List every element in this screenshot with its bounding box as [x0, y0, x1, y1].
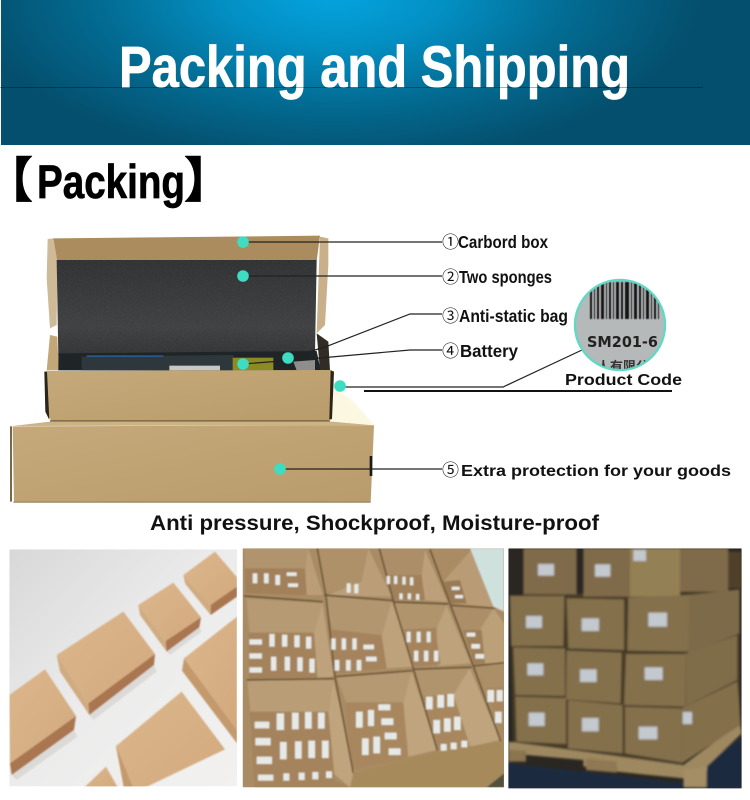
label: two sponges: Two sponges	[459, 267, 552, 287]
box C	[138, 583, 201, 652]
battery in anti-static bag	[58, 351, 321, 370]
label: product code: Product Code	[565, 372, 682, 389]
label: battery: ④	[442, 337, 459, 362]
label: cardboard box: Carbord box	[458, 232, 548, 252]
extra protection outer box	[10, 422, 374, 503]
box E	[182, 617, 237, 743]
product labels	[249, 572, 503, 781]
carton labels	[526, 550, 692, 739]
box G	[83, 767, 118, 788]
box shadows	[12, 627, 202, 780]
label: battery: Battery	[460, 341, 518, 361]
label: two sponges	[442, 263, 552, 288]
open box interior side walls	[47, 333, 330, 370]
box B	[57, 612, 155, 715]
wooden pallet	[508, 723, 742, 787]
photo: boxes packed with products	[243, 548, 504, 787]
photo: palletised cartons	[508, 548, 742, 788]
label: two sponges: ②	[442, 263, 459, 288]
sky corner	[470, 548, 504, 612]
product photo: stacked cardboard boxes	[10, 236, 375, 503]
carton fronts	[510, 595, 689, 763]
box seams	[244, 548, 504, 773]
label: anti-static bag	[442, 302, 568, 327]
carton stack backing	[509, 590, 740, 764]
product code number: SM201-6	[587, 333, 658, 351]
row 2 boxes	[247, 597, 504, 679]
photo: assorted kraft mailer boxes	[9, 549, 237, 788]
header banner	[0, 0, 750, 145]
glow behind open box	[328, 385, 375, 426]
magnifier: product code barcode	[575, 280, 665, 375]
label: extra protection: Extra protection for your goods	[461, 463, 731, 480]
top layer cartons	[523, 548, 742, 597]
label: anti-static bag: ③	[442, 302, 459, 327]
label: cardboard box	[442, 228, 548, 253]
row 3 boxes	[247, 663, 504, 787]
label: extra protection: ⑤	[442, 456, 459, 481]
box F	[116, 692, 225, 788]
label: anti-static bag: Anti-static bag	[459, 306, 568, 326]
section heading: Packing	[0, 141, 232, 211]
row 1 boxes	[244, 548, 493, 607]
label: cardboard box: ①	[442, 228, 459, 253]
barcode bars	[590, 282, 659, 319]
section heading: Packing: Packing	[37, 155, 185, 208]
section heading: Packing: 】	[184, 141, 232, 211]
warehouse floor	[508, 737, 742, 788]
label: extra protection	[442, 456, 731, 481]
box A	[9, 669, 76, 775]
foam sponge	[57, 260, 317, 357]
leader lines	[243, 242, 672, 469]
callout dots	[237, 236, 346, 475]
tagline: Anti pressure, Shockproof, Moisture-proof	[150, 512, 600, 535]
box D	[183, 552, 237, 615]
label: battery	[442, 337, 518, 362]
banner title: Packing and Shipping	[119, 35, 630, 100]
stack side panels	[682, 589, 741, 763]
open box lid and flaps	[47, 236, 328, 333]
open box front panel	[44, 370, 334, 422]
printed company characters: 人有限公	[597, 356, 649, 375]
